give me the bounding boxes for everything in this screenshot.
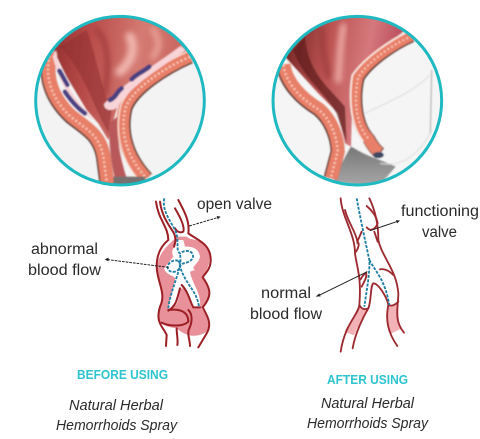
- panel: after illustration circle: [265, 13, 445, 190]
- caption: after product name: Hemorrhoids Spray: [307, 416, 429, 432]
- lumen after: [285, 13, 405, 147]
- right wall: [124, 57, 190, 178]
- label: abnormal blood flow: abnormal: [31, 241, 98, 258]
- diagram: vein with functioning valve and normal blood flow: [316, 198, 404, 352]
- label: functioning valve: valve: [422, 224, 457, 241]
- left wall: [48, 52, 107, 187]
- label: normal blood flow: normal: [261, 285, 311, 302]
- label: open valve: open valve: [197, 196, 272, 213]
- arrow: functioning valve: [370, 220, 400, 231]
- left wall: [283, 65, 338, 178]
- vein outlines: [341, 198, 404, 352]
- label: functioning valve: functioning: [401, 203, 479, 220]
- heading: after using: AFTER USING: [327, 373, 408, 387]
- caption: before product name: [56, 398, 178, 434]
- arrow: normal blood flow: [316, 272, 367, 297]
- label: functioning valve: [401, 203, 479, 241]
- caption: after product name: [307, 396, 429, 432]
- panel: before illustration circle: [30, 13, 210, 190]
- blood flow dashes: [357, 198, 389, 307]
- pink lining with varicose veins: [53, 50, 95, 121]
- pink lower veins: [345, 302, 401, 335]
- blood flow dashes: [164, 198, 199, 308]
- label: abnormal blood flow: blood flow: [28, 262, 102, 279]
- arrow: abnormal blood flow: [105, 258, 168, 267]
- caption: before product name: Hemorrhoids Spray: [56, 418, 178, 434]
- caption: before product name: Natural Herbal: [69, 398, 164, 414]
- white lumen: [164, 240, 200, 310]
- diagram: vein with open valve and abnormal blood flow: [105, 198, 221, 347]
- label: abnormal blood flow: [28, 241, 102, 279]
- arrow: open valve: [189, 216, 221, 226]
- caption: after product name: Natural Herbal: [321, 396, 415, 412]
- label: normal blood flow: blood flow: [250, 306, 323, 323]
- vein outlines: [156, 200, 211, 347]
- small vein: [373, 152, 384, 158]
- heading: before using: BEFORE USING: [77, 368, 168, 382]
- label: normal blood flow: [250, 285, 323, 323]
- pink vein body: [157, 237, 210, 336]
- lumen before: [50, 13, 193, 140]
- grey skin below: [333, 147, 396, 187]
- right wall: [356, 36, 412, 153]
